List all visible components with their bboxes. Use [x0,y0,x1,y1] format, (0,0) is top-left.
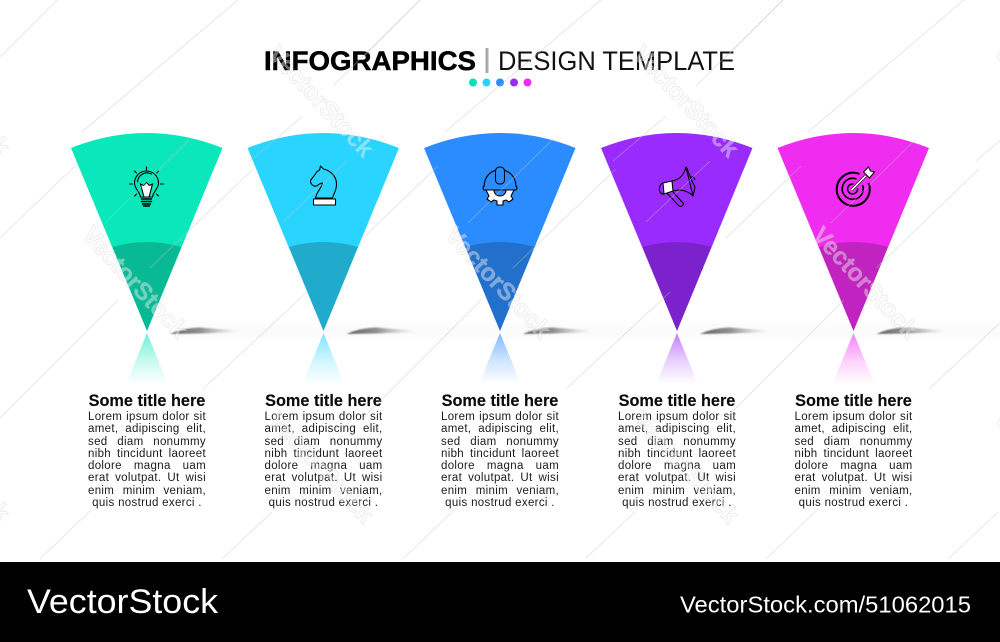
reflection [126,333,168,384]
text block: column 1: amet, adipiscing elit, [88,423,206,435]
panel: purple wedge with megaphone [601,133,769,384]
reflection [479,333,521,384]
shadow [700,328,769,334]
icon: target with arrow [837,167,874,206]
reflection [656,333,698,384]
icon: megaphone [659,167,695,206]
text block: column 4: Some title here [619,392,735,410]
icon: lightbulb [130,167,164,206]
watermark text: VectorStock [627,41,744,163]
text block: column 4: quis nostrud exerci . [622,497,732,509]
text block: column 2: enim minim veniam, [264,485,382,497]
footer brand: VectorStock [27,583,219,621]
text block: column 4: dolore magna uam [618,460,736,472]
text block: column 1: quis nostrud exerci . [92,497,202,509]
text block: column 4: Lorem ipsum dolor sit [618,411,736,423]
watermark text: VectorStock [262,41,379,163]
text block: column 2: erat volutpat. Ut wisi [264,472,382,484]
text block: column 1: erat volutpat. Ut wisi [88,472,206,484]
text block: column 1: dolore magna uam [88,460,206,472]
shadow [346,328,416,334]
text block: column 2 [264,392,382,509]
watermark text: VectorStock [627,407,744,529]
watermark text: VectorStock [262,407,379,529]
text block: column 5: amet, adipiscing elit, [794,423,912,435]
shadow [876,328,946,334]
panel: magenta wedge with target [778,133,946,384]
watermark text: VectorStock [806,222,923,344]
text block: column 2: sed diam nonummy [264,436,382,448]
text block: column 2: Some title here [265,392,382,410]
text block: column 1: enim minim veniam, [88,485,206,497]
text block: column 5: nibh tincidunt laoreet [794,448,912,460]
title: infographics design template: INFOGRAPHICS [264,46,476,76]
shadow [170,328,239,334]
floor band [180,323,1000,339]
reflection [832,333,874,384]
panel: cyan wedge with chess knight [248,133,416,384]
text block: column 4 [618,392,736,509]
footer bar [0,562,1000,642]
text block: column 3 [441,392,559,509]
text block: column 3: quis nostrud exerci . [445,497,555,509]
text block: column 1: Some title here [89,392,205,410]
title: infographics design template: DESIGN TEMPLATE [498,46,735,76]
text block: column 4: amet, adipiscing elit, [618,423,736,435]
text block: column 3: sed diam nonummy [441,436,559,448]
watermark text: VectorStock [76,222,193,344]
text block: column 5: dolore magna uam [794,460,912,472]
text block: column 3: dolore magna uam [441,460,559,472]
text block: column 5: enim minim veniam, [794,485,912,497]
text block: column 4: erat volutpat. Ut wisi [618,472,736,484]
text block: column 5: Some title here [795,392,912,410]
footer image id: VectorStock.com/51062015 [680,592,971,618]
text block: column 4: enim minim veniam, [618,485,736,497]
panel: green wedge with lightbulb [71,133,239,384]
text block: column 1: sed diam nonummy [88,436,206,448]
text block: column 5 [794,392,912,509]
watermark text [0,39,1000,529]
text block: column 2: Lorem ipsum dolor sit [264,411,382,423]
colour dots [469,78,532,86]
icon: helmet and gear [483,167,517,205]
text block: column 3: nibh tincidunt laoreet [441,448,559,460]
text block: column 1: nibh tincidunt laoreet [88,448,206,460]
text block: column 1: Lorem ipsum dolor sit [88,411,206,423]
text block: column 1 [88,392,206,509]
text block: column 3: Lorem ipsum dolor sit [441,411,559,423]
reflection [302,333,344,384]
text block: column 3: enim minim veniam, [441,485,559,497]
text block: column 3: amet, adipiscing elit, [441,423,559,435]
text block: column 5: erat volutpat. Ut wisi [794,472,912,484]
watermark text: VectorStock [439,222,556,344]
text block: column 5: Lorem ipsum dolor sit [794,411,912,423]
text block: column 5: sed diam nonummy [794,436,912,448]
text block: column 3: erat volutpat. Ut wisi [441,472,559,484]
panel: blue wedge with helmet and gear [424,133,592,384]
text block: column 4: sed diam nonummy [618,436,736,448]
text block: column 2: quis nostrud exerci . [269,497,378,509]
text block: column 3: Some title here [442,392,558,410]
shadow [523,328,592,334]
title: infographics design template [264,46,735,76]
text block: column 2: amet, adipiscing elit, [264,423,382,435]
icon: chess knight [310,166,336,205]
text block: column 2: dolore magna uam [264,460,382,472]
text block: column 2: nibh tincidunt laoreet [264,448,382,460]
text block: column 4: nibh tincidunt laoreet [618,448,736,460]
text block: column 5: quis nostrud exerci . [799,497,908,509]
